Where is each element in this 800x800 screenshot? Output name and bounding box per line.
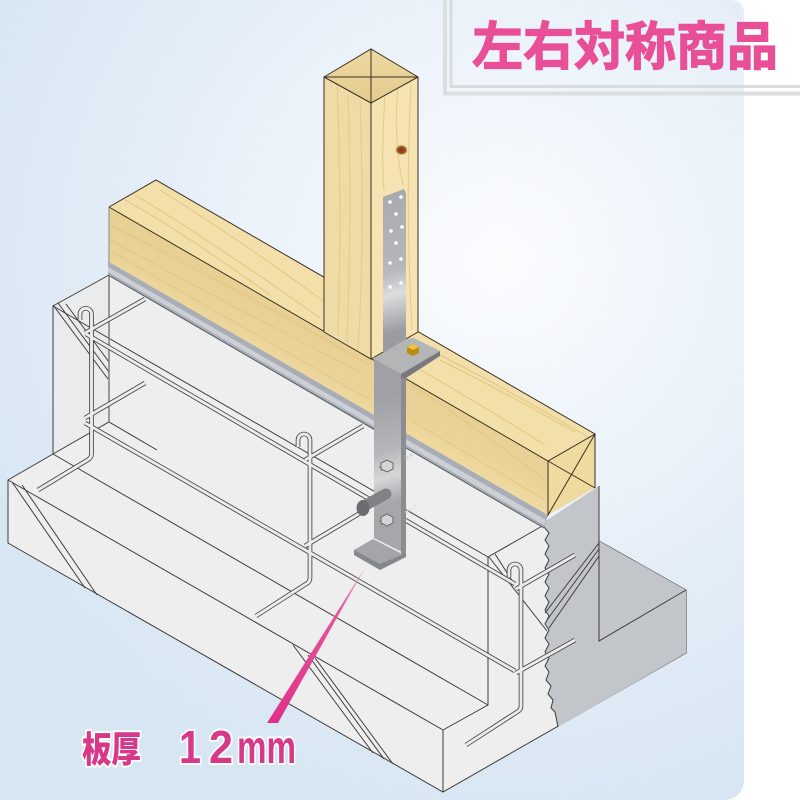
flange thickness (401, 351, 440, 378)
value: 12mm (179, 721, 296, 773)
post edge lines (324, 49, 418, 359)
icon: gold bolt (407, 344, 419, 356)
packing strip highlight (108, 267, 546, 525)
anchor bolt: shaft (364, 494, 386, 506)
anchor bolt: head (356, 500, 370, 516)
post top face (325, 49, 418, 103)
wooden sill (109, 180, 595, 515)
concrete stem left face (53, 275, 109, 454)
cut section outline (544, 486, 686, 727)
strap holes (388, 195, 404, 289)
knot (396, 145, 408, 155)
packing strip under sill (108, 261, 548, 528)
rebar (38, 299, 575, 745)
sill end face (548, 434, 595, 515)
concrete body (8, 272, 686, 792)
light rebar cores (38, 299, 575, 745)
post grain lines (337, 85, 412, 350)
label box: symmetric product: 左右対称商品 (472, 19, 778, 77)
lower plate dark side (401, 372, 406, 556)
post right face (371, 77, 418, 359)
value: 12mm: mm (237, 721, 296, 773)
diagonal lines on section (545, 543, 599, 628)
sill top face (109, 180, 595, 461)
bottom foot plate (354, 539, 404, 568)
foot plate thickness (354, 550, 406, 570)
upper fixing bolt (380, 453, 414, 472)
hidden stem back edge (108, 275, 110, 422)
pink leader arrow (267, 566, 366, 723)
lower fixing bolt (380, 504, 418, 526)
value: 12mm: 2 (209, 721, 233, 773)
top flange (373, 338, 440, 374)
wooden post (324, 49, 418, 359)
concrete edge lines (8, 275, 686, 792)
value: 12mm: 1 (179, 721, 201, 773)
label box: symmetric product (445, 0, 800, 94)
dark rebar outlines (38, 299, 575, 745)
thickness label (82, 721, 296, 773)
label: plate thickness: 板厚 (82, 729, 141, 770)
sill front face (109, 207, 548, 515)
upper strap (383, 189, 406, 354)
sill left edge (108, 207, 110, 262)
sill edge lines (109, 180, 595, 515)
packing strip lower edge (108, 275, 544, 528)
lower vertical plate (374, 358, 402, 552)
grey cut section (544, 486, 686, 727)
concrete foundation (8, 272, 686, 792)
post left face (324, 77, 371, 359)
metal bracket (354, 189, 440, 570)
sill grain lines (110, 190, 590, 500)
